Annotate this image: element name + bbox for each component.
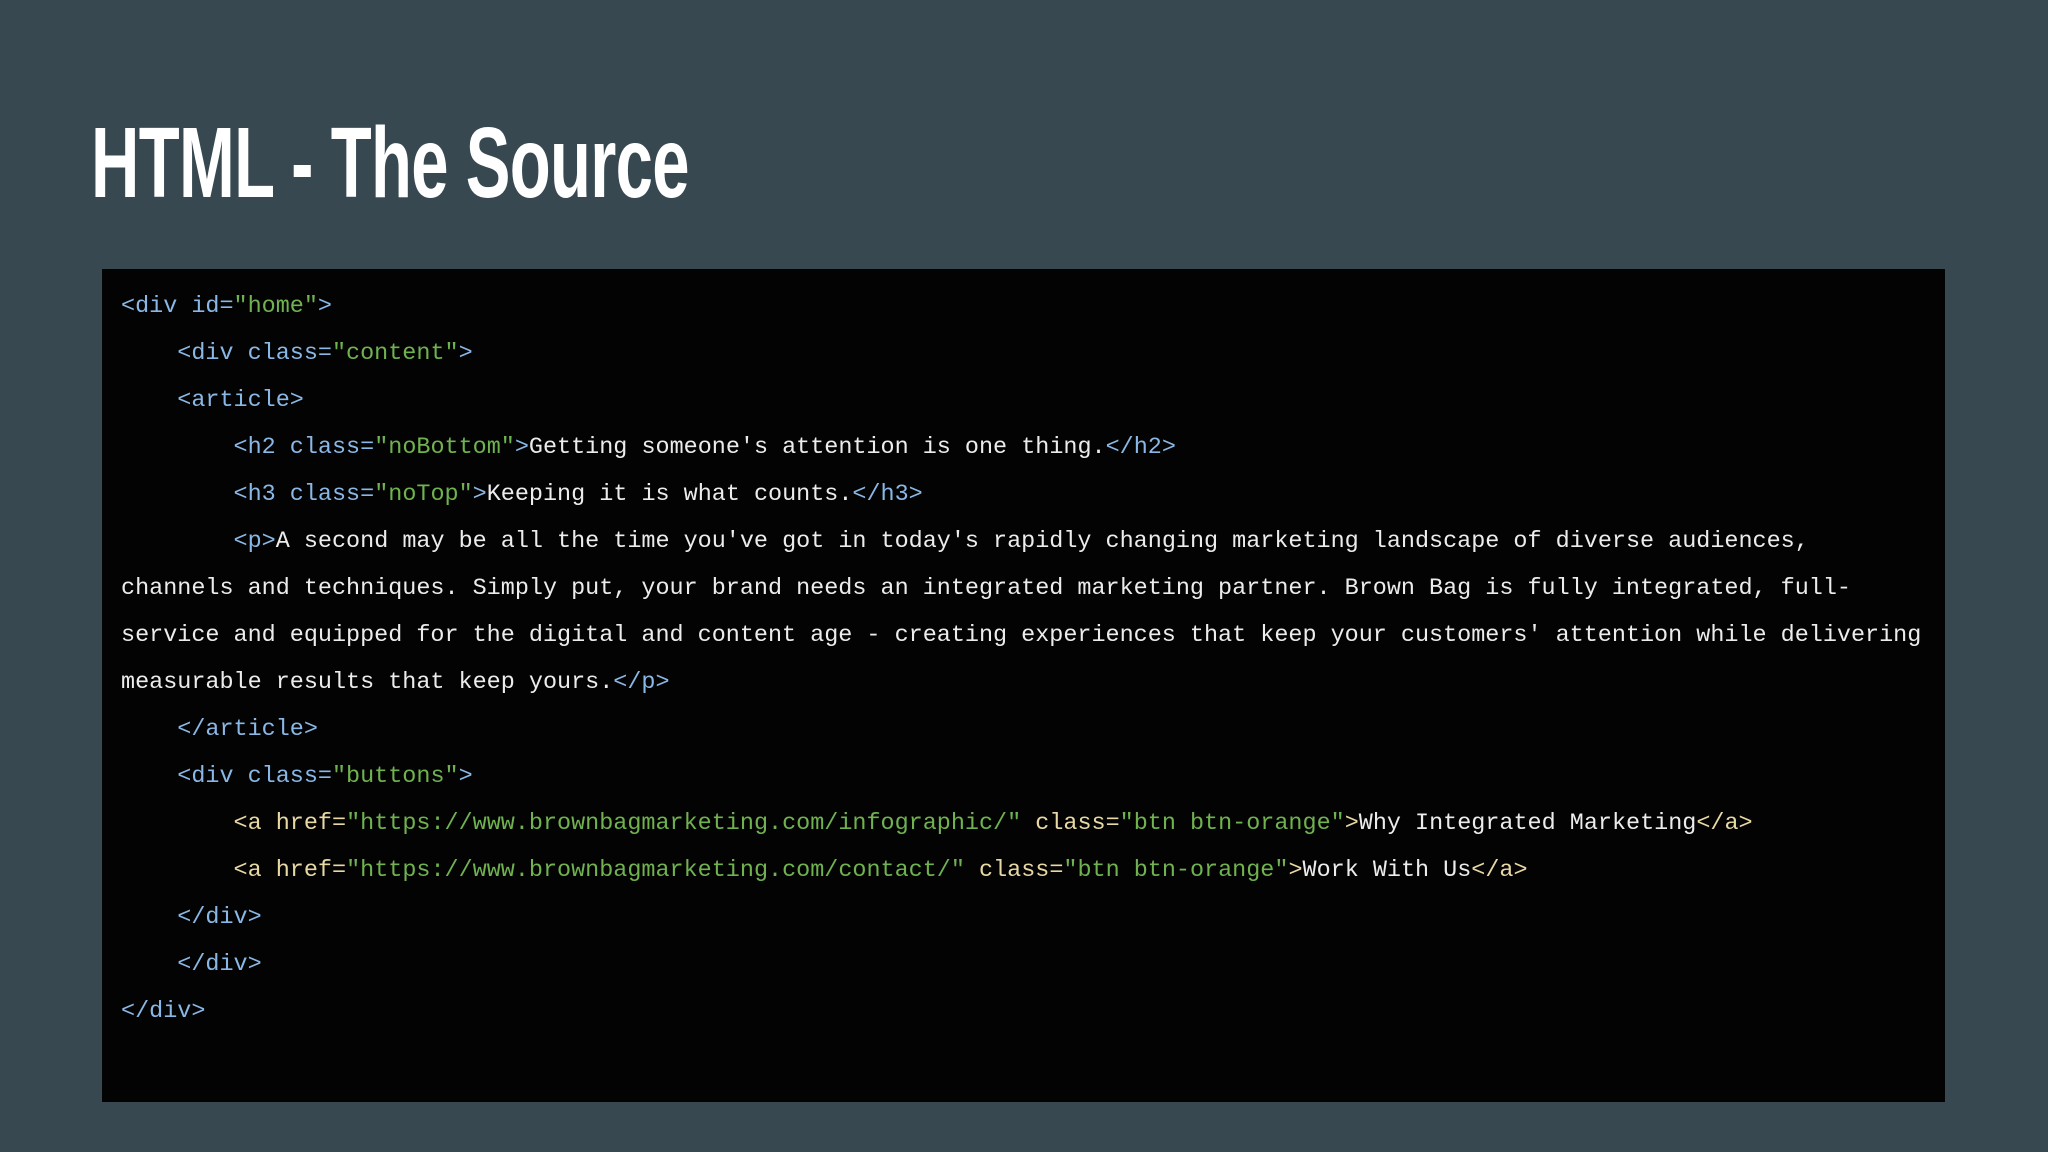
panel: code block: <div id="home"> <div class="content"> <article> <h2 class="noBottom">Getting someone's attention is one thing.</h2> <h3 class="noTop">Keeping it is what counts.</h3> <p>A second may be all the time you've got in today's rapidly changing marketing landscape of diverse audiences, channels and techniques. Simply put, your brand needs an integrated marketing partner. Brown Bag is fully integrated, full- service and equipped for the digital and content age - creating experiences that keep your customers' attention while delivering measurable results that keep yours.</p> </article> <div class="buttons"> <a href="https://www.brownbagmarketing.com/infographic/" class="btn btn-orange">Why Integrated Marketing</a> <a href="https://www.brownbagmarketing.com/contact/" class="btn btn-orange">Work With Us</a> </div> </div> </div> bbox=[121, 293, 1921, 1025]
title: HTML - The Source bbox=[91, 107, 689, 219]
